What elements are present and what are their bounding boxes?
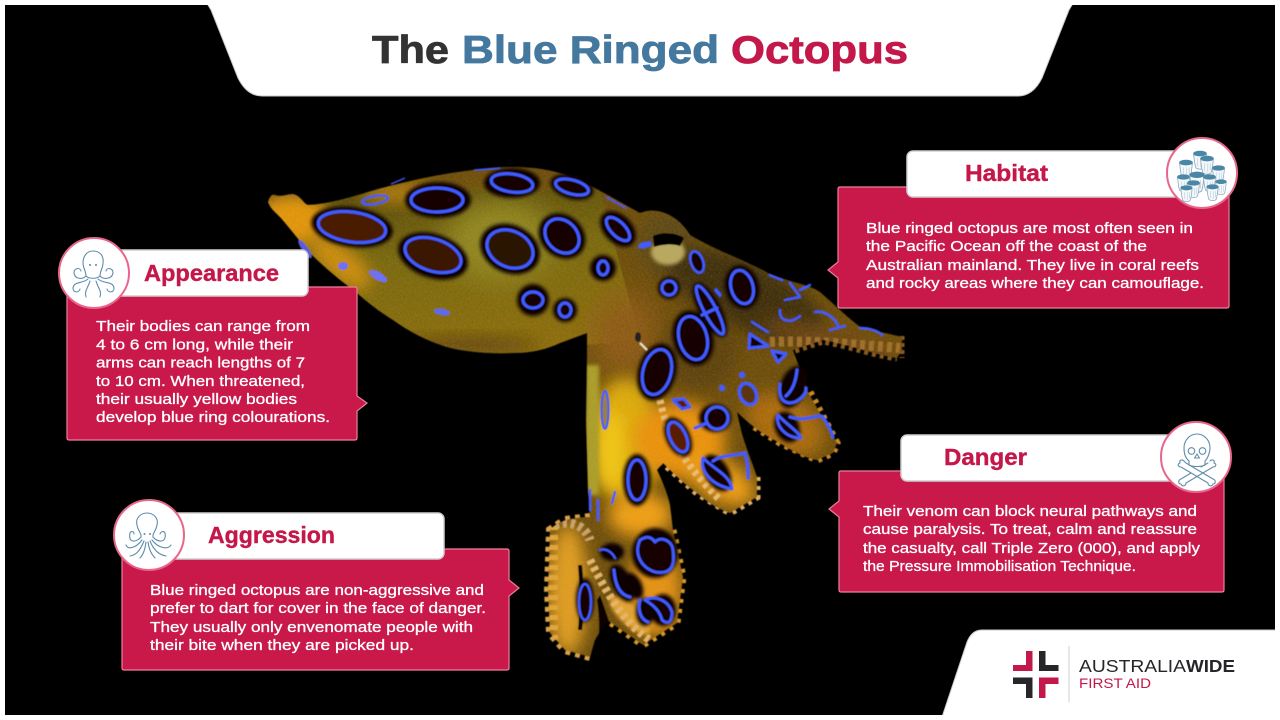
aggression body text: [150, 582, 486, 654]
octopus: coloured skin: [254, 160, 910, 670]
danger body text: the Pressure Immobilisation Technique.: [863, 558, 1136, 575]
habitat body text: and rocky areas where they can camouflage.: [866, 275, 1204, 292]
icon: curly octopus: [59, 238, 129, 308]
appearance body text: to 10 cm. When threatened,: [96, 373, 305, 390]
habitat heading: Habitat: [965, 160, 1048, 186]
danger heading: Danger: [944, 444, 1027, 470]
icon: octopus: [114, 500, 184, 570]
aggression heading: Aggression: [208, 522, 335, 548]
aggression body text: They usually only envenomate people with: [150, 619, 473, 636]
danger title box: [901, 435, 1190, 481]
aggression title box: [150, 513, 444, 559]
danger body box: [829, 471, 1224, 592]
habitat body text: [866, 220, 1204, 292]
octopus: sucker teeth outside the skin: [548, 336, 902, 657]
logo panel: [935, 625, 1280, 720]
aggression body text: Blue ringed octopus are non-aggressive and: [150, 582, 484, 599]
aggression body text: their bite when they are picked up.: [150, 637, 414, 654]
octopus illustration: [254, 160, 910, 670]
appearance title box: [95, 250, 308, 296]
octopus: skin speckle: [260, 160, 910, 670]
danger body text: the casualty, call Triple Zero (000), and apply: [863, 540, 1201, 557]
octopus: blue rings on arms: [579, 250, 882, 622]
title word: Octopus: Octopus: [731, 29, 908, 72]
danger body text: cause paralysis. To treat, calm and reassure: [863, 521, 1197, 538]
appearance body box: [67, 287, 367, 440]
logo wordmark bold: WIDE: [1186, 656, 1235, 676]
title word: The: The: [372, 29, 449, 72]
habitat body text: Australian mainland. They live in coral reefs: [866, 257, 1199, 274]
panel: habitat: [828, 138, 1237, 308]
logo mark: cross: [1013, 651, 1058, 698]
logo divider: [1068, 646, 1070, 702]
octopus: dark gaps between arms: [578, 540, 646, 634]
appearance body text: develop blue ring colourations.: [96, 409, 330, 426]
octopus: blue rings on mantle: [296, 168, 653, 317]
habitat body box: [828, 187, 1229, 308]
danger body text: [863, 503, 1201, 575]
logo wordmark: AUSTRALIA: [1079, 656, 1186, 676]
octopus: dark ring halos: [309, 168, 813, 626]
appearance body text: Their bodies can range from: [96, 318, 310, 335]
habitat body text: Blue ringed octopus are most often seen in: [866, 220, 1193, 237]
appearance body text: arms can reach lengths of 7: [96, 354, 305, 372]
panel: aggression: [114, 500, 519, 670]
habitat body text: the Pacific Ocean off the coast of the: [866, 238, 1147, 255]
logo subtitle: FIRST AID: [1079, 675, 1151, 691]
appearance body text: their usually yellow bodies: [96, 391, 297, 408]
appearance body text: [96, 318, 330, 426]
danger body text: Their venom can block neural pathways and: [863, 503, 1197, 520]
aggression body box: [122, 549, 519, 670]
aggression body text: prefer to dart for cover in the face of danger.: [150, 600, 486, 617]
octopus: eye: [651, 233, 685, 265]
panel: danger: [829, 422, 1231, 592]
habitat title box: [907, 151, 1190, 197]
panel: appearance: [59, 238, 367, 440]
appearance heading: Appearance: [144, 260, 279, 286]
title word: Blue Ringed: Blue Ringed: [462, 29, 719, 72]
title banner: [0, 0, 1280, 96]
octopus: sucker edges: [553, 342, 900, 640]
appearance body text: 4 to 6 cm long, while their: [96, 336, 293, 354]
icon: coral: [1167, 138, 1237, 208]
icon: skull and crossbones: [1161, 422, 1231, 492]
